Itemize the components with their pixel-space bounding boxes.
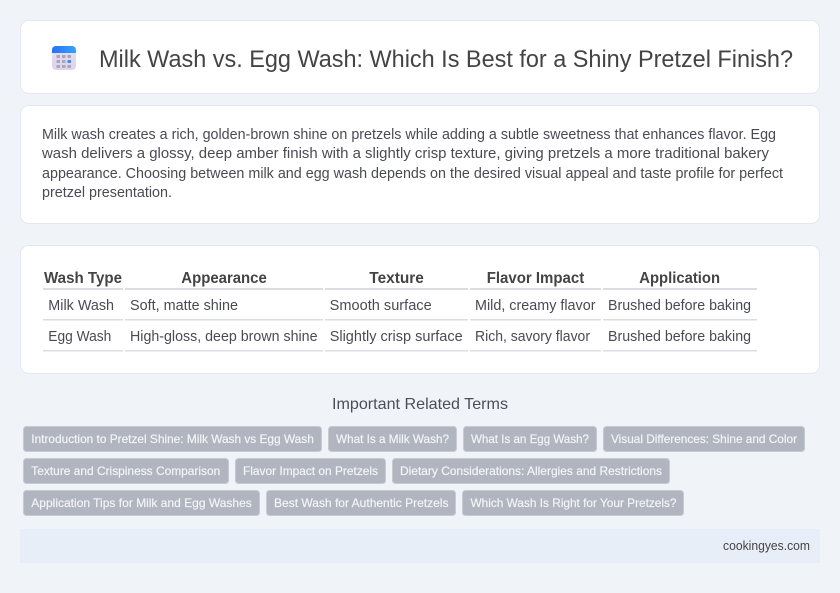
table row: milk wash: Brushed before baking	[608, 298, 751, 314]
tag	[604, 426, 804, 452]
tag	[462, 490, 684, 516]
text block: intro paragraph: pretzel presentation.	[42, 185, 172, 201]
table header row: Appearance	[181, 270, 267, 287]
icon: calendar	[52, 46, 76, 70]
heading: related terms: Important Related Terms	[332, 396, 508, 413]
table row: milk wash: Smooth surface	[330, 298, 432, 314]
table row: milk wash: Milk Wash	[48, 298, 114, 314]
tag: Texture and Crispiness Comparison	[31, 464, 220, 478]
tag: What Is a Milk Wash?	[336, 432, 449, 446]
table row: egg wash: Egg Wash	[48, 329, 111, 345]
table row: egg wash: Slightly crisp surface	[330, 329, 463, 345]
panel: comparison table	[20, 246, 820, 374]
tag	[392, 458, 670, 484]
table row: milk wash: Mild, creamy flavor	[475, 298, 596, 314]
tag	[24, 426, 322, 452]
table row: egg wash: High-gloss, deep brown shine	[130, 329, 318, 345]
panel: header	[20, 20, 820, 94]
table row: egg wash	[48, 329, 751, 345]
panel: intro text	[20, 106, 820, 224]
tag: Best Wash for Authentic Pretzels	[274, 496, 448, 510]
tag	[236, 458, 386, 484]
tag	[24, 490, 260, 516]
text block: intro paragraph: wash delivers a glossy, deep amber finish with a slightly crisp texture, giving pretzels a more traditional bakery	[41, 146, 770, 162]
footer	[20, 529, 820, 563]
text block: intro paragraph: appearance. Choosing between milk and egg wash depends on the desired visual appeal and taste profile for perfect	[42, 166, 783, 182]
tag: What Is an Egg Wash?	[471, 432, 589, 446]
text block: intro paragraph	[41, 127, 783, 201]
tag	[328, 426, 456, 452]
table header row: Flavor Impact	[487, 270, 585, 287]
table header row	[44, 270, 720, 287]
table header row: Wash Type	[44, 270, 122, 287]
table row: milk wash: Soft, matte shine	[130, 298, 238, 314]
table row: egg wash: Brushed before baking	[608, 329, 751, 345]
tag: Which Wash Is Right for Your Pretzels?	[470, 496, 677, 510]
table header row: Application	[639, 270, 720, 287]
tag: Dietary Considerations: Allergies and Restrictions	[400, 464, 662, 478]
tag: Introduction to Pretzel Shine: Milk Wash vs Egg Wash	[31, 432, 314, 446]
title: Milk Wash vs. Egg Wash: Which Is Best for a Shiny Pretzel Finish?	[99, 46, 793, 73]
tag	[266, 490, 456, 516]
tag	[24, 458, 228, 484]
footer source text: cookingyes.com	[723, 539, 810, 553]
table header row: Texture	[369, 270, 424, 287]
tag: Flavor Impact on Pretzels	[243, 464, 378, 478]
text block: intro paragraph: Milk wash creates a rich, golden-brown shine on pretzels while adding a subtle sweetness that enhances flavor. Egg	[42, 127, 776, 143]
tag: Visual Differences: Shine and Color	[611, 432, 797, 446]
table row: milk wash	[48, 298, 751, 314]
table row: egg wash: Rich, savory flavor	[475, 329, 590, 345]
tag	[464, 426, 596, 452]
tag list: related terms	[24, 426, 804, 516]
tag: Application Tips for Milk and Egg Washes	[31, 496, 252, 510]
